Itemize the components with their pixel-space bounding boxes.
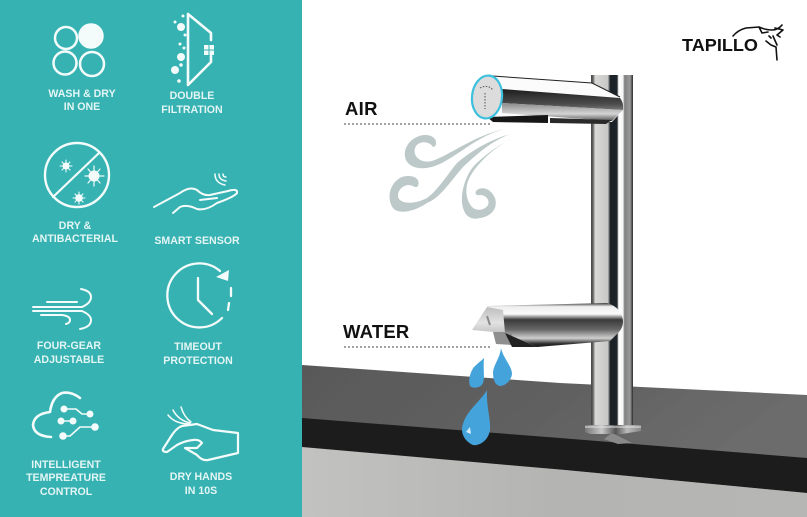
water label: WATER bbox=[343, 321, 409, 342]
label: timeout protection: TIMEOUT bbox=[174, 341, 222, 353]
countertop and floor scene bbox=[302, 365, 807, 517]
icon: dry and antibacterial bbox=[45, 143, 109, 207]
label: wash and dry in one: WASH & DRY bbox=[48, 88, 116, 100]
label: smart sensor: SMART SENSOR bbox=[154, 235, 240, 247]
label: dry and antibacterial: DRY & bbox=[59, 220, 92, 232]
faucet bbox=[470, 74, 641, 444]
icon: wash and dry in one bbox=[54, 24, 104, 76]
label: dry hands in 10s: IN 10S bbox=[185, 485, 217, 497]
label: wash and dry in one: IN ONE bbox=[64, 101, 100, 113]
air label: AIR bbox=[345, 98, 378, 119]
icon: four-gear adjustable wind bbox=[33, 289, 91, 329]
icon: intelligent temperature cloud bbox=[33, 393, 99, 440]
icon: double filtration bbox=[171, 14, 214, 85]
air outlet arm bbox=[470, 74, 623, 124]
faucet base bbox=[585, 425, 641, 444]
label: double filtration: FILTRATION bbox=[161, 104, 223, 116]
label: four-gear adjustable: FOUR-GEAR bbox=[37, 340, 101, 352]
icon: smart sensor hand bbox=[154, 174, 237, 213]
panel: feature list bbox=[0, 0, 302, 517]
label: intelligent temperature control: CONTROL bbox=[40, 486, 93, 498]
water outlet arm bbox=[472, 303, 623, 347]
icon: water drops bbox=[462, 348, 512, 445]
icon: timeout clock bbox=[167, 263, 231, 327]
label: dry hands in 10s: DRY HANDS bbox=[170, 471, 232, 483]
icon: elephant outline bbox=[733, 25, 783, 60]
label: intelligent temperature control: INTELLIGENT bbox=[31, 459, 101, 471]
air dotted leader line bbox=[344, 123, 490, 125]
icon: dry hands in 10s bbox=[163, 407, 238, 460]
label: timeout protection: PROTECTION bbox=[163, 355, 233, 367]
faucet pole bbox=[591, 75, 633, 426]
air outlet disc bbox=[470, 74, 504, 120]
logo: Tapillo bbox=[682, 25, 783, 60]
label: double filtration: DOUBLE bbox=[170, 90, 214, 102]
label: four-gear adjustable: ADJUSTABLE bbox=[34, 354, 104, 366]
logo: Tapillo: TAPILLO bbox=[682, 35, 758, 55]
label: dry and antibacterial: ANTIBACTERIAL bbox=[32, 233, 118, 245]
label: intelligent temperature control: TEMPREATURE bbox=[26, 472, 106, 484]
water dotted leader line bbox=[344, 346, 490, 348]
icon: air swirls bbox=[390, 129, 512, 219]
